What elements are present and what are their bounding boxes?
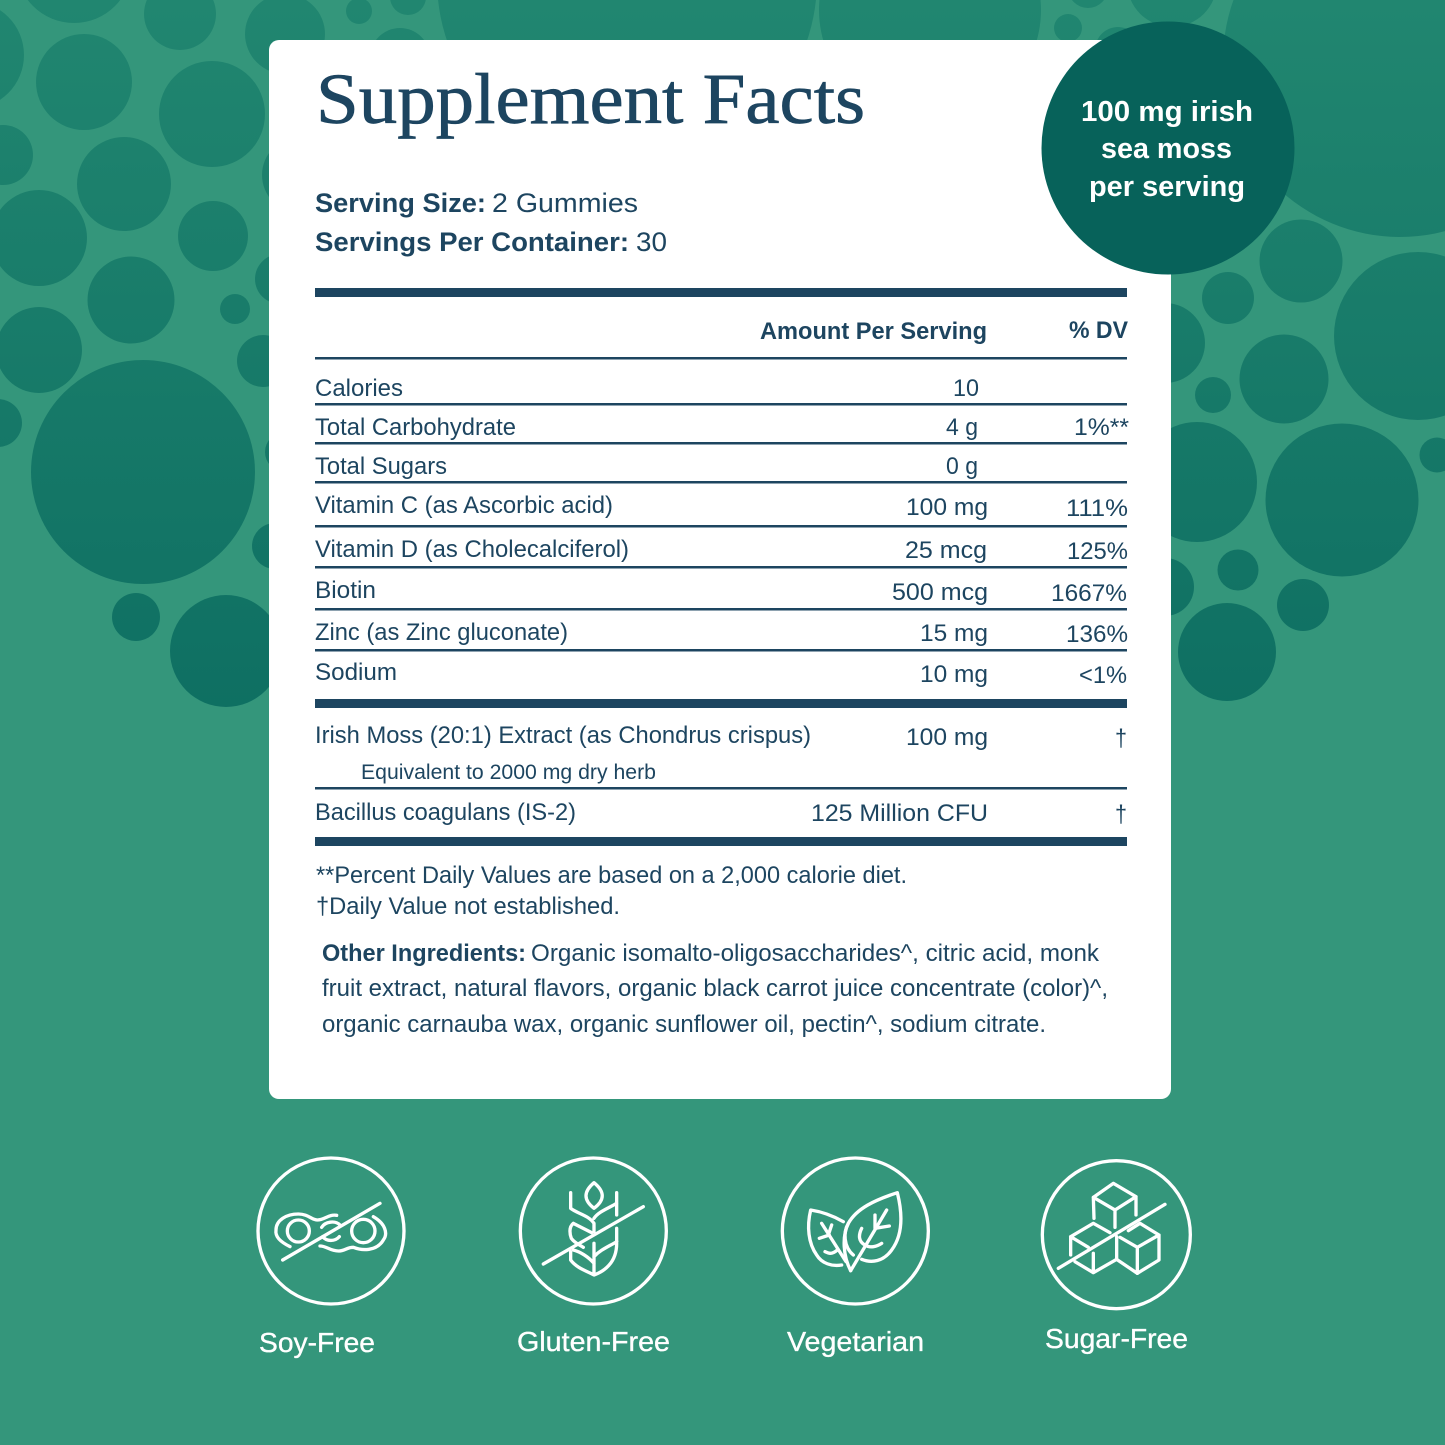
table header: % DV [1069,317,1129,344]
row: total carbohydrate: 4 g [946,414,978,441]
other ingredients: fruit extract, natural flavors, organic black carrot juice concentrate (color)^, [322,975,1108,1002]
row: vitamin c: 100 mg [906,494,988,521]
icon: soy-free [258,1158,404,1304]
row: vitamin c [315,492,1128,522]
icon: sugar-free [1042,1161,1190,1309]
row: irish moss: Equivalent to 2000 mg dry herb [361,761,656,784]
row: irish moss: Irish Moss (20:1) Extract (as Chondrus crispus) [315,722,811,749]
row: vitamin d: Vitamin D (as Cholecalciferol) [315,536,629,563]
other ingredients: Other Ingredients: [322,940,526,967]
background bubbles [0,0,1445,707]
row: zinc [315,619,1128,648]
row: irish moss [315,722,1127,784]
row: bacillus coagulans: Bacillus coagulans (IS-2) [315,799,576,826]
panel: supplement facts card [269,40,1171,1099]
row: sodium: <1% [1079,662,1127,689]
row: irish moss: † [1115,725,1127,752]
row: total sugars [315,453,978,480]
serving info: 2 Gummies [492,188,638,218]
row: sodium [315,659,1127,689]
badge: 100 mg irish sea moss: sea moss [1101,133,1232,165]
footnotes [316,862,907,920]
row: total sugars: Total Sugars [315,453,447,480]
badge: 100 mg irish sea moss [1042,22,1294,274]
other ingredients: Organic isomalto-oligosaccharides^, citric acid, monk [531,940,1100,967]
row: irish moss: 100 mg [906,724,988,751]
row: calories: Calories [315,375,403,402]
row: total carbohydrate [315,414,1129,441]
serving info: Serving Size: [315,188,486,218]
row: vitamin d: 25 mcg [905,537,987,564]
row: total sugars: 0 g [946,453,978,480]
row: sodium: Sodium [315,659,397,686]
label: sugar-free: Sugar-Free [1045,1323,1188,1354]
row: bacillus coagulans: † [1115,801,1127,828]
other ingredients: organic carnauba wax, organic sunflower oil, pectin^, sodium citrate. [322,1011,1046,1038]
row: zinc: Zinc (as Zinc gluconate) [315,619,568,646]
table header: Amount Per Serving [760,318,987,345]
row: biotin: 1667% [1051,580,1127,607]
row: zinc: 136% [1066,621,1128,648]
footnotes: **Percent Daily Values are based on a 2,000 calorie diet. [316,862,907,889]
row: biotin [315,577,1127,607]
icon: gluten-free [520,1158,666,1304]
serving info: 30 [636,227,667,257]
row: vitamin d [315,536,1128,565]
row: calories [315,375,979,402]
row: biotin: 500 mcg [892,579,988,606]
table header [760,317,1129,345]
row: bacillus coagulans: 125 Million CFU [811,800,988,827]
label: soy-free: Soy-Free [259,1327,375,1358]
icon: vegetarian [782,1158,928,1304]
row: total carbohydrate: Total Carbohydrate [315,414,516,441]
row: biotin: Biotin [315,577,376,604]
other ingredients [322,940,1108,1038]
badge: 100 mg irish sea moss: 100 mg irish [1081,96,1253,128]
footnotes: †Daily Value not established. [316,893,620,920]
badge: 100 mg irish sea moss: per serving [1089,171,1245,203]
row: bacillus coagulans [315,799,1127,828]
serving info [315,188,667,257]
row: vitamin d: 125% [1067,538,1128,565]
table rules [315,288,1127,846]
row: sodium: 10 mg [920,661,988,688]
row: zinc: 15 mg [920,620,988,647]
row: vitamin c: 111% [1066,495,1128,522]
row: vitamin c: Vitamin C (as Ascorbic acid) [315,492,613,519]
label: vegetarian: Vegetarian [787,1326,924,1357]
serving info: Servings Per Container: [315,227,629,257]
label: gluten-free: Gluten-Free [517,1326,670,1357]
row: calories: 10 [953,375,979,402]
title: Supplement Facts [316,59,865,139]
row: total carbohydrate: 1%** [1074,414,1129,441]
